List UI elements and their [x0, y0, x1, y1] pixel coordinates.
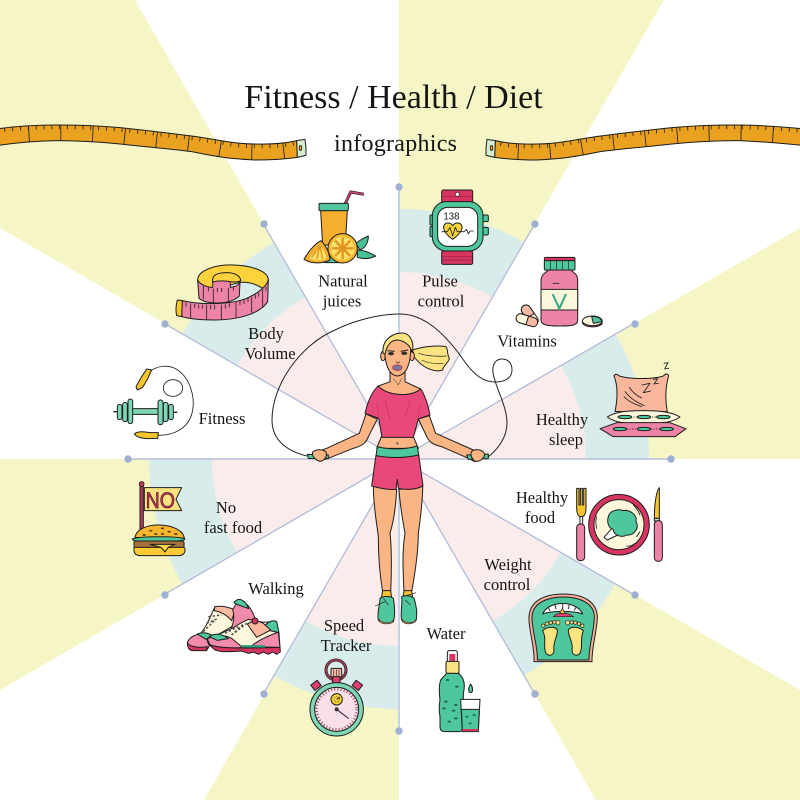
icon: pulse watch: 138 [443, 212, 459, 223]
label: pulse control: Pulse [422, 272, 458, 290]
icon: healthy food plate and cutlery [577, 488, 662, 561]
icon: stopwatch [310, 660, 363, 736]
label: healthy food: food [525, 508, 556, 527]
woman figure [307, 333, 488, 624]
light blue ring segments [149, 209, 649, 709]
icon: no fast food flag and burger [132, 482, 185, 556]
label: weight control: Weight [484, 555, 532, 574]
icon: no fast food flag and burger: NO [146, 488, 175, 513]
icon: pulse watch [430, 190, 488, 264]
icon: tape measure body volume [176, 265, 268, 320]
pale pink inner segments [212, 272, 586, 646]
label: pulse control: control [418, 292, 465, 310]
skipping rope [272, 314, 512, 457]
label: no fast food: No [216, 498, 236, 517]
label: vitamins: Vitamins [497, 332, 557, 350]
label: body volume: Volume [244, 344, 296, 363]
icon: juice glass with citrus [304, 192, 376, 263]
subtitle: infographics [334, 131, 457, 157]
icon: dumbbell and skipping rope [113, 366, 193, 439]
label: speed tracker: Tracker [321, 636, 372, 655]
label: healthy sleep: Healthy [536, 410, 589, 429]
icon: vitamins bottle and pills [515, 257, 602, 328]
icon: water bottle and glass [439, 651, 480, 732]
label: weight control: control [484, 575, 531, 594]
measuring tape left [0, 125, 306, 160]
label: healthy sleep: sleep [549, 430, 583, 449]
label: water: Water [427, 624, 466, 643]
measuring tape right [486, 125, 800, 160]
label: walking: Walking [248, 579, 304, 598]
icon: weighing scale [529, 594, 597, 662]
icon: pillow healthy sleep [600, 363, 686, 437]
label: natural juices: juices [322, 292, 361, 310]
label: speed tracker: Speed [324, 616, 365, 635]
label: body volume: Body [248, 324, 285, 343]
label: no fast food: fast food [204, 518, 263, 537]
label: natural juices: Natural [318, 272, 368, 290]
radial lines with end dots [124, 183, 675, 735]
title: Fitness / Health / Diet [244, 79, 543, 116]
icon: walking shoes [187, 599, 280, 654]
label: fitness: Fitness [199, 409, 245, 428]
label: healthy food: Healthy [516, 488, 569, 507]
